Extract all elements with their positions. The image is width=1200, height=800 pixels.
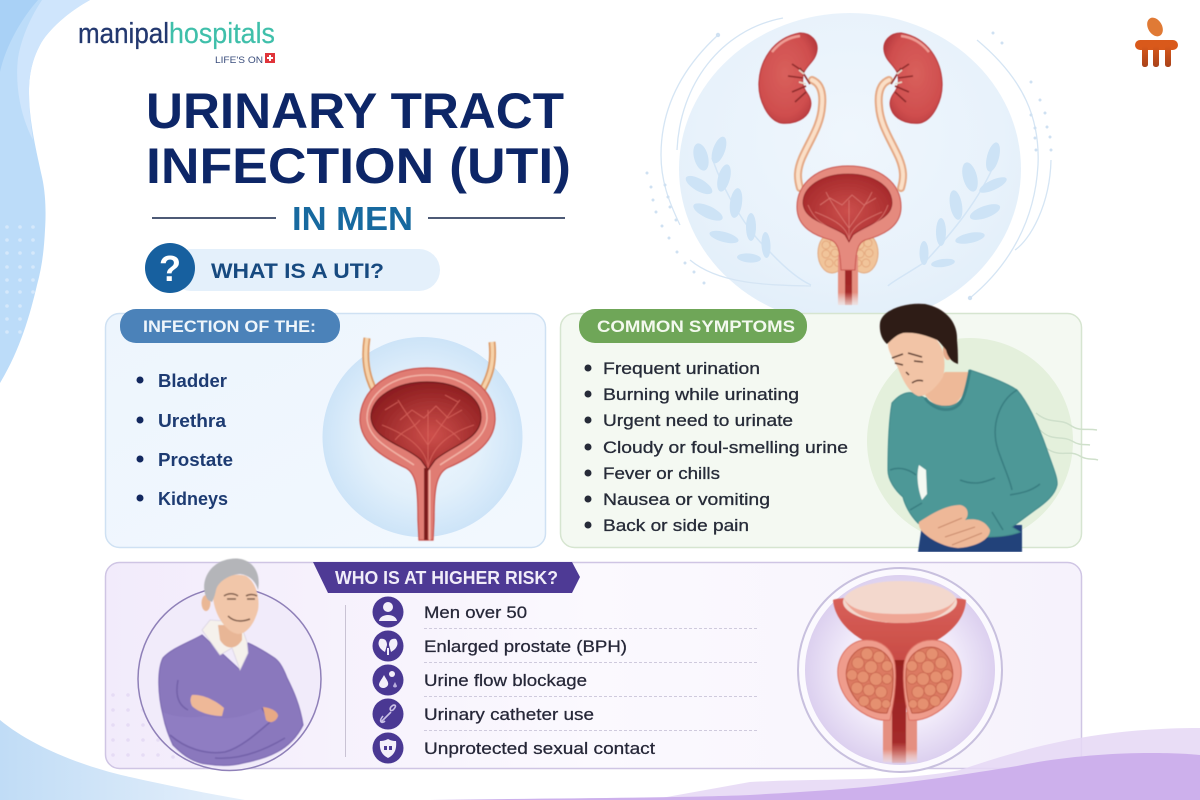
illustration: older man: [138, 559, 321, 770]
risk: men over 50: Men over 50: [424, 603, 527, 622]
list of sites: Bladder: [158, 371, 227, 391]
background: left blue wave: [0, 0, 90, 383]
header pill: INFECTION OF THE:: [143, 317, 316, 336]
list of symptoms: [584, 359, 848, 535]
list of symptoms: Urgent need to urinate: [603, 411, 793, 430]
list of sites: Kidneys: [158, 489, 228, 509]
list of sites: Prostate: [158, 450, 233, 470]
pain waves: [1036, 413, 1098, 460]
panel: infection of the: [106, 309, 546, 548]
logo: Manipal Hospitals: manipal: [78, 18, 169, 50]
panel: who is at higher risk: [106, 559, 1082, 772]
icon: catheter: [372, 698, 404, 730]
list of sites: Urethra: [158, 411, 227, 431]
collar: [202, 620, 248, 670]
crossed arm: [163, 708, 270, 753]
jeans: [918, 525, 1022, 552]
illustration: man holding stomach: [880, 304, 1057, 552]
neck: [925, 372, 968, 408]
list of symptoms: Frequent urination: [603, 359, 760, 378]
left kidney and ureter: [759, 33, 822, 188]
header banner: WHO IS AT HIGHER RISK?: [335, 568, 558, 588]
icon: prostate: [372, 630, 404, 662]
brand mark: orange figure: [1135, 15, 1178, 67]
icon: droplets: [372, 664, 404, 696]
hands: [919, 505, 990, 548]
hair: [880, 304, 958, 364]
sweater: [888, 370, 1057, 537]
bladder: [797, 166, 901, 270]
illustration: urinary system in circle: [646, 13, 1052, 325]
risk: urine flow blockage: Urine flow blockage: [424, 671, 587, 690]
risk: unprotected sexual contact: Unprotected sexual contact: [424, 739, 655, 758]
logo: Manipal Hospitals: LIFE'S ON: [215, 55, 263, 66]
risk list: [372, 596, 757, 764]
hair: [204, 559, 259, 602]
background: bottom blue wave: [0, 720, 245, 800]
title: INFECTION (UTI): [146, 138, 571, 194]
backdrop circle: [867, 338, 1073, 544]
ear: [942, 346, 951, 360]
left lobe: [838, 640, 896, 720]
title: URINARY TRACT: [146, 83, 564, 139]
subtitle: in men: IN MEN: [292, 200, 413, 237]
list of symptoms: Nausea or vomiting: [603, 490, 770, 509]
header pill: [120, 309, 340, 343]
heading: what is a UTI: ?: [159, 248, 181, 289]
risk: enlarged prostate: Enlarged prostate (BPH): [424, 637, 627, 656]
illustration: prostate: [798, 568, 1002, 772]
divider: [344, 605, 346, 757]
right lobe: [903, 640, 961, 720]
bladder base: [833, 596, 966, 720]
heading: what is a UTI: WHAT IS A UTI?: [211, 260, 384, 283]
title: [146, 83, 571, 194]
risk: urinary catheter use: Urinary catheter use: [424, 705, 594, 724]
icon: person: [372, 596, 404, 628]
illustration: bladder: [322, 337, 522, 540]
dots: [111, 693, 175, 759]
sweater: [159, 635, 303, 765]
heading: what is a UTI: [145, 243, 440, 293]
prostate lobes: [818, 233, 878, 273]
panel: common symptoms: [560, 304, 1098, 552]
logo: Manipal Hospitals: [78, 18, 275, 66]
header pill: [579, 309, 807, 343]
list of sites: [136, 371, 233, 509]
leaf sprigs: [683, 135, 1009, 286]
face: [213, 575, 258, 634]
background: bottom purple waves: [430, 728, 1200, 800]
icon: shield: [372, 732, 404, 764]
ear: [202, 595, 210, 611]
urethra: [883, 712, 917, 762]
header banner: [313, 562, 580, 593]
dots: [646, 32, 1052, 300]
face: [888, 332, 944, 396]
list of symptoms: Burning while urinating: [603, 385, 799, 404]
list of symptoms: Back or side pain: [603, 516, 749, 535]
list of symptoms: Cloudy or foul-smelling urine: [603, 438, 848, 457]
backdrop circle: [679, 13, 1021, 325]
right kidney and ureter: [879, 33, 942, 188]
list of symptoms: Fever or chills: [603, 464, 720, 483]
hands: [190, 695, 224, 716]
header pill: COMMON SYMPTOMS: [597, 317, 795, 336]
urethra: [838, 240, 858, 305]
logo: Manipal Hospitals: hospitals: [169, 18, 275, 50]
